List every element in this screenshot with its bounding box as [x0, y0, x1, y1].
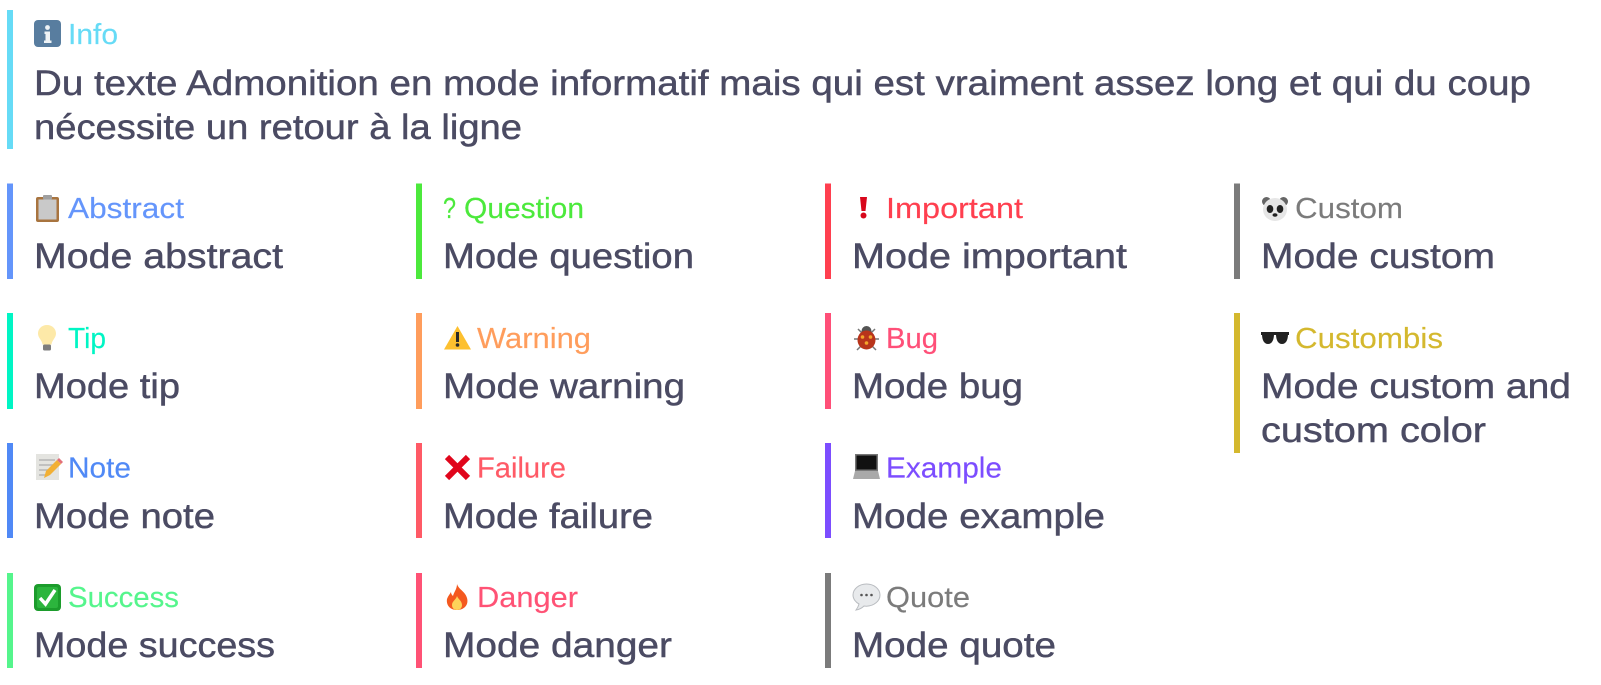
- title: Info: Info: [68, 19, 118, 51]
- text: failure body: Mode failure: [443, 496, 653, 536]
- panel: danger admonition: [416, 573, 672, 668]
- text: success body: Mode success: [34, 625, 275, 665]
- text: quote body: Mode quote: [852, 625, 1056, 665]
- panel: success admonition: [7, 573, 275, 668]
- text: note body: Mode note: [34, 496, 215, 536]
- icon: light bulb: [38, 325, 56, 350]
- title: Success: Success: [68, 582, 179, 614]
- text: info body second line: nécessite un retour à la ligne: [34, 107, 522, 147]
- panel: tip admonition: [7, 313, 180, 409]
- icon: flame: [447, 584, 467, 610]
- text: warning body: Mode warning: [443, 366, 685, 406]
- text: custombis body second line: custom color: [1261, 410, 1486, 450]
- icon: question mark: ?: [443, 193, 456, 225]
- icon: speech bubble: [853, 584, 880, 610]
- icon: information: [34, 20, 61, 47]
- text: custom body: Mode custom: [1261, 236, 1495, 276]
- icon: exclamation mark: [860, 197, 867, 218]
- title: Example: Example: [886, 452, 1002, 484]
- icon: clipboard: [36, 195, 59, 222]
- panel: custombis admonition: [1234, 313, 1571, 453]
- title: Warning: Warning: [477, 323, 591, 355]
- icon: panda: [1262, 197, 1288, 221]
- text: tip body: Mode tip: [34, 366, 180, 406]
- text: danger body: Mode danger: [443, 625, 672, 665]
- title: Danger: Danger: [477, 582, 578, 614]
- title: Tip: Tip: [68, 323, 106, 355]
- title: Custom: Custom: [1295, 193, 1403, 225]
- panel: bug admonition: [825, 313, 1023, 409]
- title: Question: Question: [464, 193, 584, 225]
- title: Failure: Failure: [477, 452, 566, 484]
- panel: note admonition: [7, 443, 215, 538]
- panel: abstract admonition: [7, 184, 283, 279]
- text: abstract body: Mode abstract: [34, 236, 283, 276]
- title: Abstract: Abstract: [68, 193, 184, 225]
- text: info body: Du texte Admonition en mode informatif mais qui est vraiment assez long et qui du coup: [34, 63, 1531, 103]
- panel: important admonition: [825, 184, 1127, 279]
- title: Important: Important: [886, 193, 1023, 225]
- title: Note: Note: [68, 452, 131, 484]
- text: question body: Mode question: [443, 236, 694, 276]
- icon: warning triangle: [444, 326, 471, 350]
- title: Custombis: Custombis: [1295, 323, 1443, 355]
- panel: example admonition: [825, 443, 1105, 538]
- title: Quote: Quote: [886, 582, 970, 614]
- icon: check mark: [34, 584, 61, 611]
- text: custombis body: Mode custom and: [1261, 366, 1571, 406]
- text: bug body: Mode bug: [852, 366, 1023, 406]
- title: Bug: Bug: [886, 323, 938, 355]
- panel: custom admonition: [1234, 184, 1495, 279]
- text: example body: Mode example: [852, 496, 1105, 536]
- panel: failure admonition: [416, 443, 653, 538]
- icon: sunglasses: [1261, 332, 1289, 344]
- icon: red cross: [447, 457, 468, 478]
- panel: info admonition: [7, 10, 1531, 149]
- panel: warning admonition: [416, 313, 685, 409]
- icon: laptop: [853, 454, 880, 479]
- panel: quote admonition: [825, 573, 1056, 668]
- icon: ladybug: [854, 326, 879, 350]
- panel: question admonition: [416, 184, 694, 279]
- icon: memo with pencil: [36, 454, 63, 480]
- text: important body: Mode important: [852, 236, 1127, 276]
